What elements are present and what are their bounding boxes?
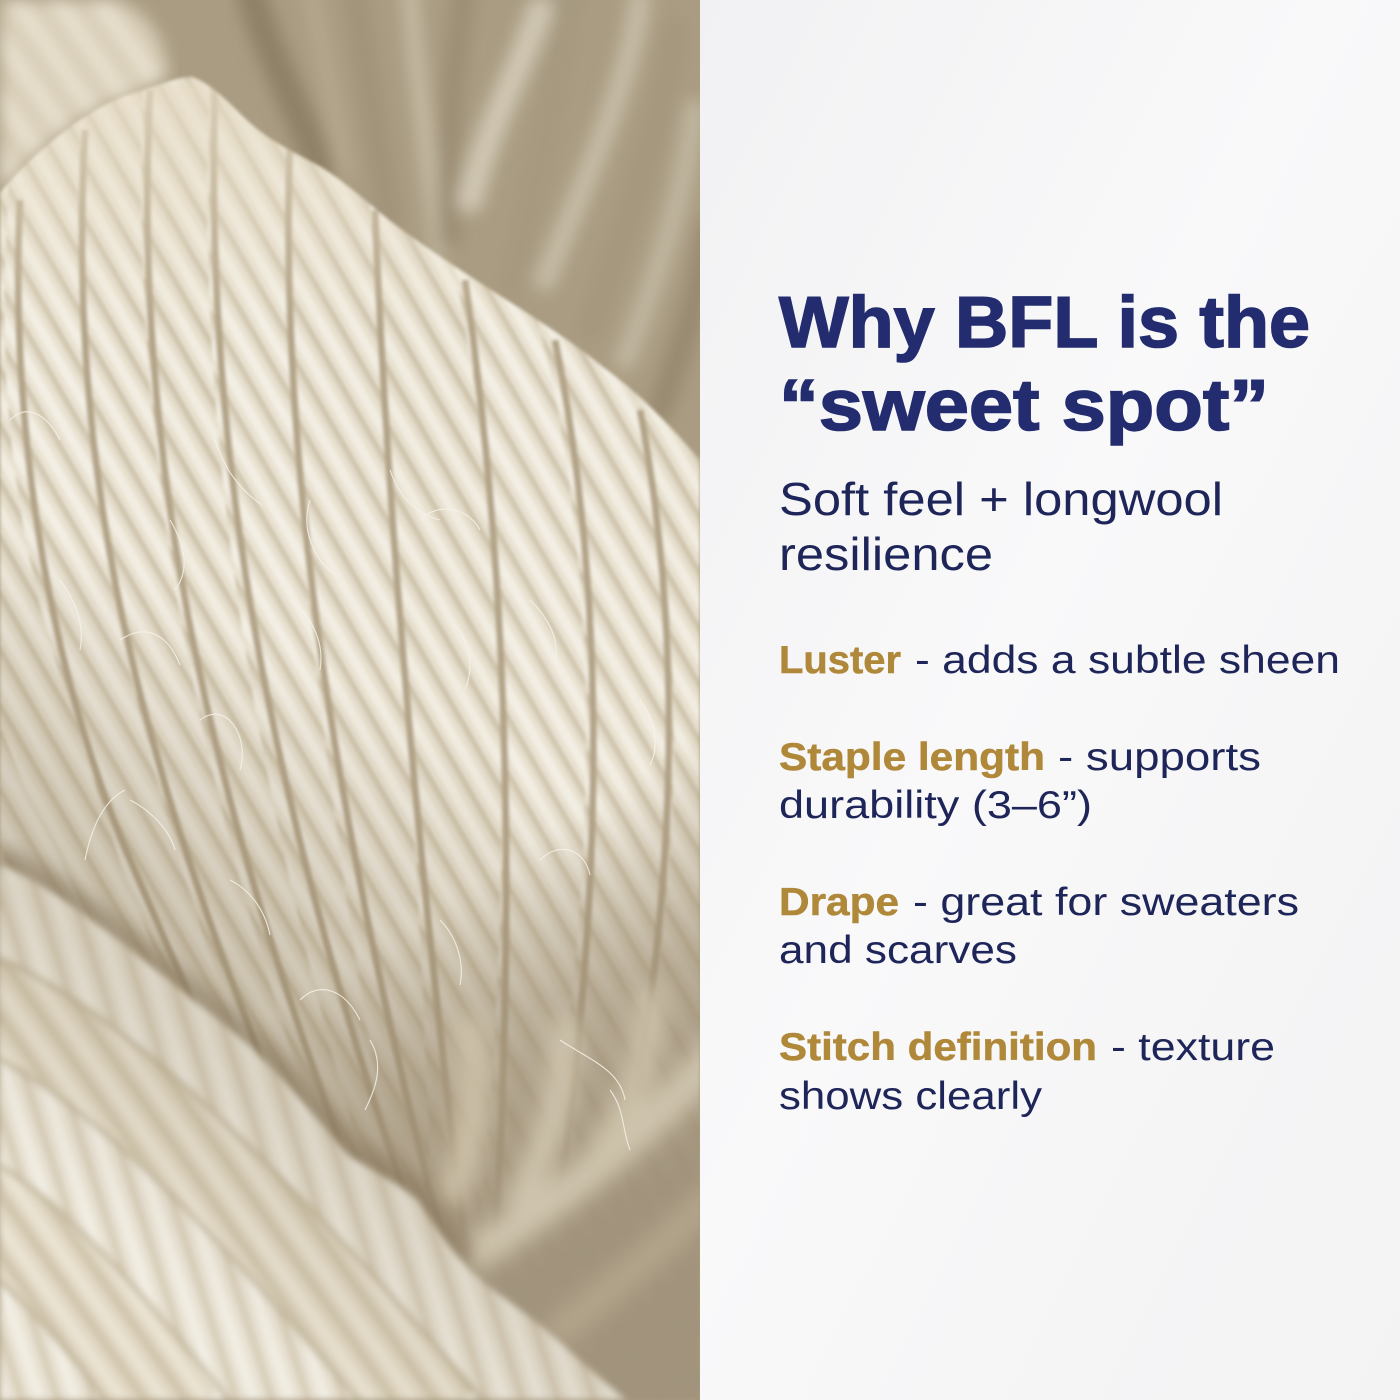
shadow between main and lower bundles	[0, 858, 467, 1260]
benefit: drape: Drape	[779, 881, 899, 924]
strands	[0, 184, 152, 966]
benefit: stitch definition	[779, 1026, 1275, 1118]
lower yarn bundle	[0, 864, 626, 1400]
benefit: drape: - great for sweaters	[913, 881, 1299, 924]
title: Why BFL is the	[779, 283, 1310, 363]
subtitle	[779, 473, 1223, 580]
back yarn strands, out of focus	[250, 0, 710, 410]
benefit: stitch definition: - texture	[1111, 1026, 1275, 1069]
benefit: luster: Luster	[779, 639, 901, 682]
benefit: stitch definition: shows clearly	[779, 1075, 1043, 1118]
benefit: staple length: - supports	[1058, 736, 1261, 779]
benefit: drape	[779, 881, 1299, 972]
benefit: stitch definition: Stitch definition	[779, 1026, 1097, 1069]
strand grooves	[18, 85, 669, 1310]
benefit: luster	[779, 639, 1340, 682]
out-of-focus strands, lower right	[455, 1000, 720, 1330]
benefit: staple length: durability (3–6”)	[779, 784, 1092, 827]
subtitle: Soft feel + longwool	[779, 473, 1223, 525]
loose fibres	[10, 412, 655, 1150]
main yarn bundle	[0, 0, 720, 1400]
title: “sweet spot”	[779, 366, 1269, 446]
title	[779, 283, 1310, 446]
top-left yarn bundle	[0, 0, 170, 195]
benefit: staple length	[779, 736, 1261, 827]
benefit: staple length: Staple length	[779, 736, 1045, 779]
benefit: drape: and scarves	[779, 929, 1017, 972]
photo: close-up of cream BFL yarn skein	[0, 0, 720, 1400]
panel: text background	[700, 0, 1400, 1400]
subtitle: resilience	[779, 528, 993, 580]
benefit: luster: - adds a subtle sheen	[915, 639, 1340, 682]
